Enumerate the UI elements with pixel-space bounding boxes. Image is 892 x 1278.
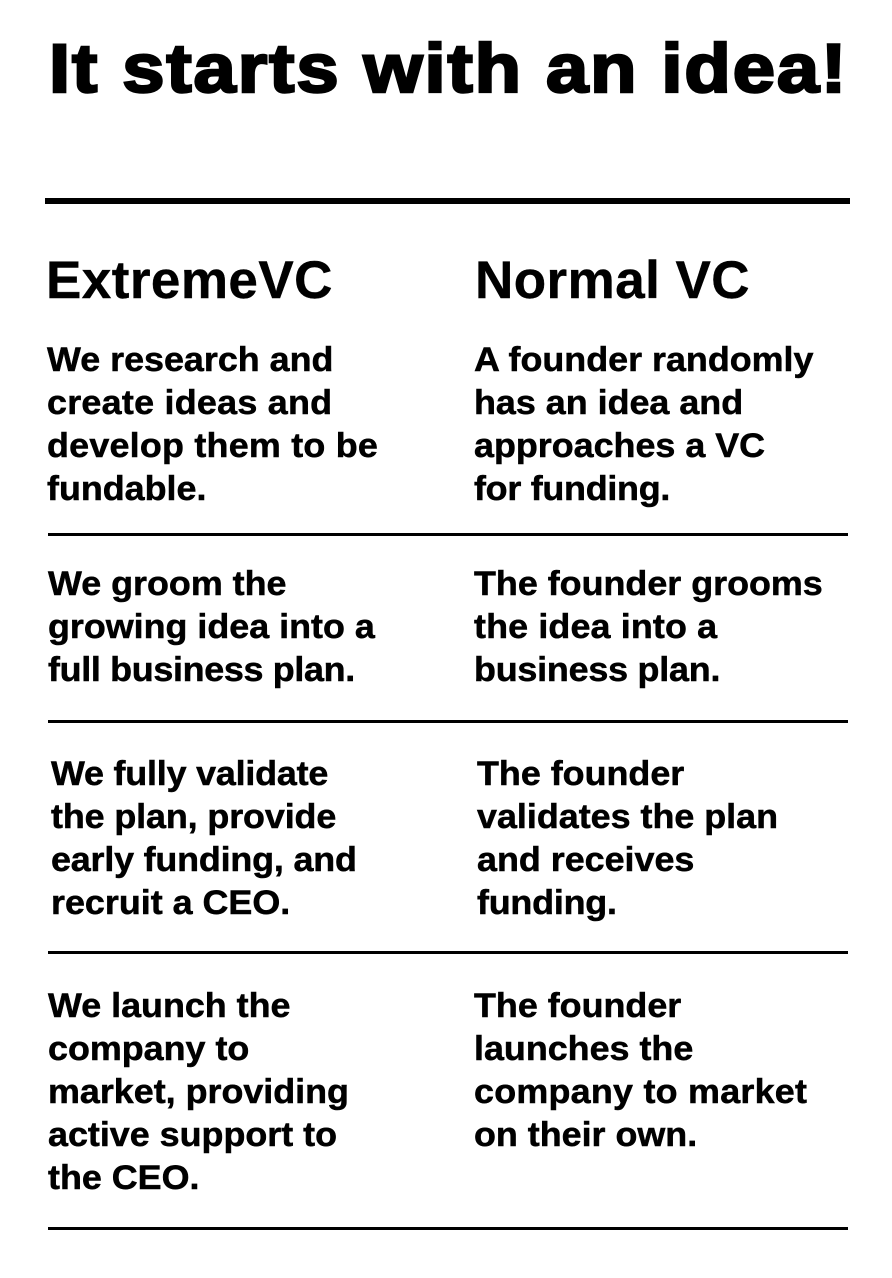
row 4 right text: on their own. (474, 1116, 697, 1154)
row 2 right text: the idea into a (474, 608, 717, 646)
row 4 left text: company to (48, 1030, 249, 1068)
row 1 right text: approaches a VC (474, 427, 765, 465)
row 3 left text: the plan, provide (51, 798, 336, 836)
row 3 right text: validates the plan (477, 798, 778, 836)
heading: ExtremeVC: ExtremeVC (46, 251, 333, 310)
row 3 left text: recruit a CEO. (51, 884, 290, 922)
row 4 right text: company to market (474, 1073, 807, 1111)
title: It starts with an idea! (49, 30, 848, 107)
row 1 left text: develop them to be (47, 427, 378, 465)
row 4 left text (48, 987, 349, 1197)
row 3 left text (50, 755, 357, 922)
row 4 right text (474, 987, 807, 1154)
row 2 right text (474, 565, 823, 689)
row 3 left text: early funding, and (51, 841, 357, 879)
row 4 left text: We launch the (48, 987, 291, 1025)
row 1 right text: A founder randomly (474, 341, 813, 379)
heading: Normal VC: Normal VC (475, 251, 750, 310)
row 4 right text: The founder (474, 987, 681, 1025)
row 2 left text: full business plan. (48, 651, 355, 689)
row 2 right text: The founder grooms (474, 565, 823, 603)
row 2 right text: business plan. (474, 651, 720, 689)
row 4 left text: the CEO. (48, 1159, 199, 1197)
row 2 left text: We groom the (48, 565, 286, 603)
row 1 right text: for funding. (474, 470, 670, 508)
row 1 left text: create ideas and (47, 384, 332, 422)
row 1 left text: We research and (47, 341, 333, 379)
row 1 right text (474, 341, 814, 508)
row 4 left text: market, providing (48, 1073, 349, 1111)
row 3 right text (476, 755, 778, 922)
row 2 left text: growing idea into a (48, 608, 375, 646)
row 4 right text: launches the (474, 1030, 693, 1068)
row 1 left text (46, 341, 378, 508)
row 4 left text: active support to (48, 1116, 337, 1154)
row 1 right text: has an idea and (474, 384, 743, 422)
row 2 left text (48, 565, 376, 689)
row 3 right text: The founder (477, 755, 684, 793)
row 3 left text: We fully validate (51, 755, 328, 793)
row 1 left text: fundable. (47, 470, 206, 508)
row 3 right text: and receives (477, 841, 694, 879)
row 3 right text: funding. (477, 884, 617, 922)
